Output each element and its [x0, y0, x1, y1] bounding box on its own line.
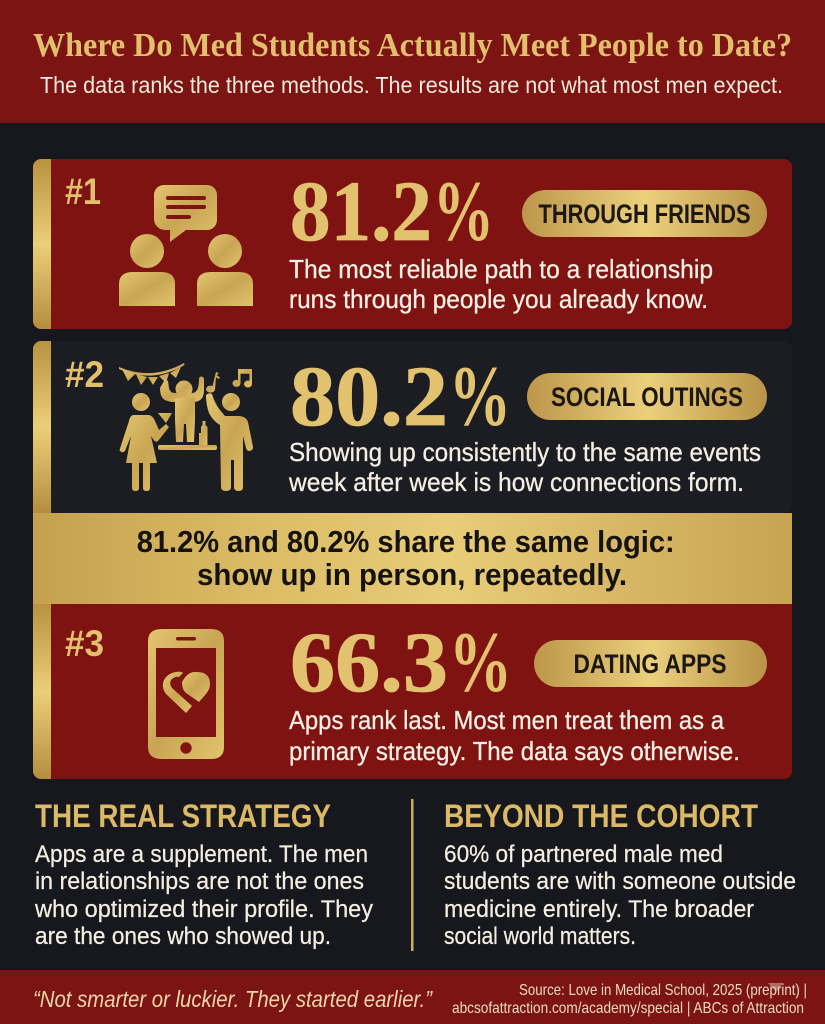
icon: phone with heart [148, 629, 224, 759]
header banner [0, 0, 825, 123]
description 3: primary strategy. The data says otherwise. [289, 736, 740, 766]
statistic 80.2%: 80.2 [290, 348, 448, 444]
callout band [33, 513, 792, 604]
description 2: week after week is how connections form. [288, 467, 744, 497]
quote: “Not smarter or luckier. They started earlier.” [33, 986, 433, 1012]
rank label 1: #1 [65, 171, 101, 212]
description 1: runs through people you already know. [289, 284, 708, 314]
statistic 81.2%: % [433, 163, 494, 259]
text block: beyond the cohort: social world matters. [444, 923, 636, 950]
text block: the real strategy: who optimized their profile. They [34, 896, 374, 923]
rank label 2: #2 [65, 354, 104, 395]
statistic 66.3%: 66.3 [290, 614, 448, 710]
icon: two people talking [119, 185, 253, 306]
pill: through friends [522, 190, 767, 237]
text block: the real strategy: Apps are a supplement. The men [35, 841, 368, 868]
callout band: show up in person, repeatedly. [197, 557, 627, 592]
statistic 81.2%: 81.2 [290, 163, 432, 259]
statistic 66.3%: % [449, 614, 512, 710]
text block: the real strategy: are the ones who showed up. [35, 923, 331, 950]
rank label 3: #3 [65, 623, 104, 664]
pill: through friends: THROUGH FRIENDS [538, 199, 750, 229]
title: Where Do Med Students Actually Meet People to Date? [33, 27, 792, 64]
panel: rank 3 dating apps [33, 604, 792, 779]
callout band: 81.2% and 80.2% share the same logic: [137, 524, 675, 559]
text block: beyond the cohort: students are with someone outside [444, 868, 796, 895]
statistic 80.2%: % [449, 348, 511, 444]
pill: social outings [527, 373, 767, 420]
pill: dating apps: DATING APPS [574, 649, 726, 679]
description 3: Apps rank last. Most men treat them as a [289, 705, 724, 735]
description 1: The most reliable path to a relationship [289, 254, 713, 284]
text block: beyond the cohort: medicine entirely. The broader [444, 896, 754, 923]
icon: party [119, 363, 253, 491]
description 2: Showing up consistently to the same events [289, 437, 761, 467]
panel: rank 1 through friends [33, 159, 792, 329]
pill: social outings: SOCIAL OUTINGS [551, 382, 743, 412]
pill: dating apps [534, 640, 767, 687]
text block: the real strategy [34, 798, 380, 950]
text block: beyond the cohort [444, 798, 803, 950]
text block: beyond the cohort: 60% of partnered male med [444, 841, 723, 868]
text block: the real strategy: in relationships are not the ones [35, 868, 364, 895]
text block: the real strategy: THE REAL STRATEGY [35, 798, 331, 834]
footer banner [0, 970, 825, 1024]
panel: rank 2 social outings [33, 341, 792, 513]
text block: beyond the cohort: BEYOND THE COHORT [444, 798, 758, 834]
